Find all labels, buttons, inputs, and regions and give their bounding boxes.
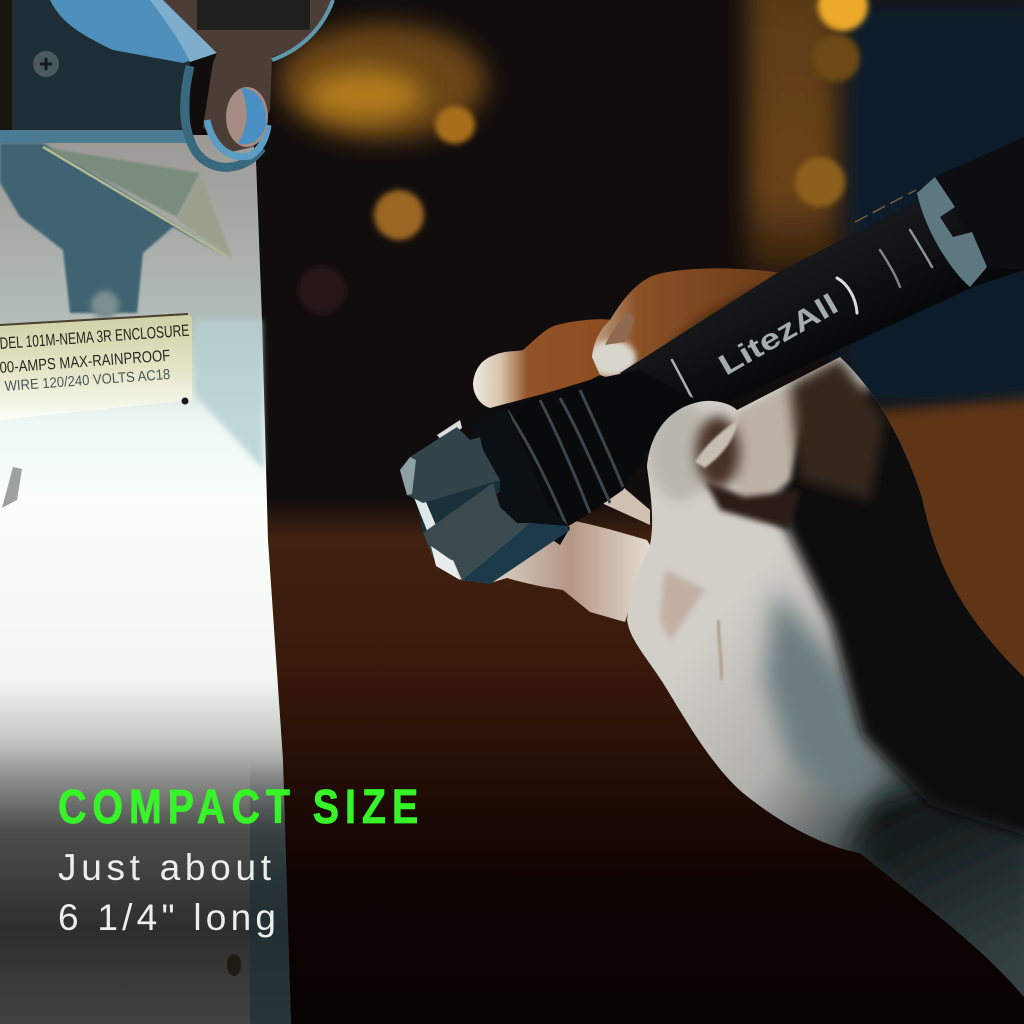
- nameplate with model text: 00-AMPS MAX-RAINPROOF: [0, 347, 171, 377]
- background: blurred orange floor: [250, 500, 1024, 1024]
- pale blue right strip: [195, 320, 264, 470]
- hand: palm and thumb over barrel: [620, 350, 1024, 1010]
- thumb tone overlay: [648, 400, 712, 500]
- tail end: [935, 137, 1024, 270]
- hook hole: [226, 87, 268, 147]
- icon: screw: [33, 51, 59, 77]
- small mark and screw on box: [2, 467, 22, 508]
- nameplate with model text: WIRE 120/240 VOLTS AC18: [4, 367, 171, 395]
- barrel: [620, 137, 1024, 440]
- lens fingertip glow: [431, 546, 460, 580]
- dark wedge under knuckle: [705, 480, 800, 530]
- nameplate with model text: DEL 101M-NEMA 3R ENCLOSURE: [0, 322, 190, 353]
- dark blue side at bottom: [250, 760, 291, 1024]
- thumb shadow: [696, 416, 740, 488]
- skin fold pink: [660, 570, 705, 640]
- top crown: [400, 427, 500, 503]
- head dark inner: [467, 408, 570, 545]
- flashlight: [400, 137, 1024, 584]
- grip marks: [640, 230, 932, 423]
- fingers behind flashlight: [430, 260, 836, 622]
- background: warm right wall: [860, 398, 1024, 720]
- bokeh lights: [278, 0, 868, 314]
- description: 6 1/4" long: [58, 897, 276, 938]
- brand logo on barrel: LitezAll: [714, 288, 844, 382]
- thumbnail highlight: [695, 420, 738, 468]
- description: [58, 847, 276, 938]
- brown back of hand: [790, 358, 885, 500]
- middle finger: [473, 319, 612, 408]
- ribbed neck: [507, 370, 697, 527]
- wrist: [850, 780, 1024, 1010]
- lower crown: [423, 483, 530, 580]
- crease: [718, 620, 722, 680]
- cast shadow on box: [0, 143, 227, 313]
- nameplate with model text: [0, 314, 192, 420]
- lower lip: [462, 523, 570, 584]
- blue lever: [50, 0, 213, 63]
- green lit triangle: [43, 147, 200, 217]
- description: Just about: [58, 847, 272, 888]
- small lit circle in shadow: [91, 291, 119, 319]
- index finger: [592, 268, 778, 377]
- dark back of hand: [775, 380, 1024, 840]
- teal palm shadow: [765, 590, 880, 800]
- lens glow strip: [413, 495, 438, 533]
- electrical box panel: [0, 135, 291, 1024]
- knuckle: [734, 386, 798, 498]
- head main body: [415, 480, 500, 533]
- lower fingers: [430, 520, 650, 622]
- text block: headline and description: [58, 780, 424, 938]
- tail cap ring: [917, 177, 987, 287]
- top metal latch plate: [0, 0, 333, 167]
- hook body: [163, 0, 333, 153]
- heading: COMPACT SIZE: [58, 780, 424, 834]
- hook strap: [185, 66, 262, 167]
- rim light dashes: [855, 190, 916, 222]
- background: blurred night wall: [0, 0, 1024, 540]
